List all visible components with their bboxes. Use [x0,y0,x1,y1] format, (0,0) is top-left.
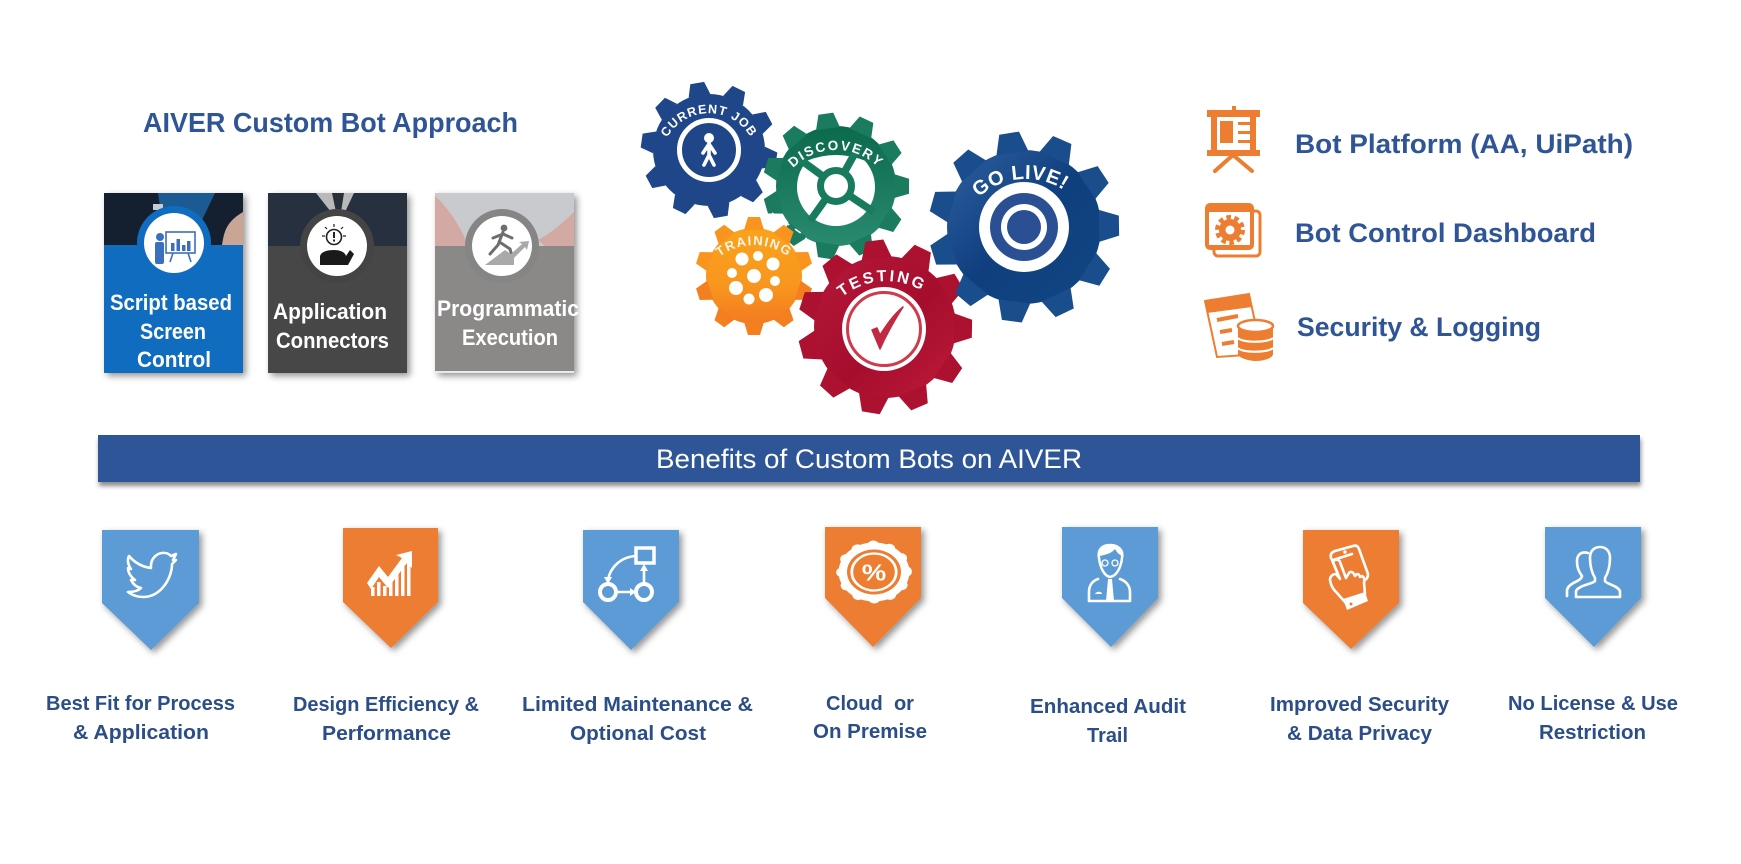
dashed seam on discovery gear [772,213,811,251]
label: improved security: Improved Security [1270,693,1450,716]
label: best fit: Best Fit for Process [46,692,235,715]
icon: gear training [696,217,812,335]
banner: benefits of custom bots [98,435,1640,482]
icon: presenter at chart board [155,232,195,264]
label: cloud or on premise [813,692,927,743]
label: limited maintenance: Optional Cost [570,722,706,745]
label: cloud or on premise: On Premise [813,720,927,743]
icon: person with glasses [1089,544,1130,601]
label: improved security: & Data Privacy [1287,722,1433,745]
shield: no license [1545,527,1641,647]
text: bot platform: Bot Platform (AA, UiPath) [1295,129,1633,159]
label: limited maintenance [522,693,753,745]
icon: gear testing [798,240,972,414]
panel: application connectors card: Application [273,299,387,324]
icon: log sheet and database [1205,294,1273,361]
shield: cloud or on premise [825,527,921,647]
shield: enhanced audit trail [1062,527,1158,647]
icon: percent badge: % [862,561,886,586]
label: no license [1508,692,1678,744]
panel: script based screen control card: Control [137,347,211,372]
icon: gear discovery [764,112,910,259]
label: enhanced audit trail: Trail [1087,724,1128,747]
shield: improved security [1303,530,1399,649]
heading: AIVER Custom Bot Approach: AIVER Custom Bot Approach [143,107,518,138]
icon: control dashboard window [1205,203,1260,256]
icon: rising chart [367,551,412,596]
label: design efficiency: Performance [322,722,451,745]
label: improved security [1270,693,1450,745]
label: design efficiency: Design Efficiency & [293,693,479,716]
panel: script based screen control card: Script based [110,290,232,315]
panel: programmatic execution card [435,193,579,373]
icon: gear current job [640,82,778,218]
label: best fit: & Application [73,721,209,744]
shield: best fit [102,530,199,650]
panel: application connectors card: Connectors [276,328,389,353]
icon: gear go live [930,132,1120,322]
text: security and logging: Security & Logging [1297,312,1541,342]
icon: runner climbing a rising arrow [485,225,529,265]
label: no license: No License & Use [1508,692,1678,715]
label: limited maintenance: Limited Maintenance & [522,693,753,716]
icon: two users [1567,547,1620,597]
panel: programmatic execution card: Execution [462,325,558,350]
icon: gear testing: TESTING [836,270,924,295]
label: design efficiency [293,693,479,745]
panel: script based screen control card [104,193,243,373]
label: enhanced audit trail [1030,695,1186,747]
text: bot control dashboard: Bot Control Dashboard [1295,218,1596,248]
panel: application connectors card [268,193,407,373]
label: best fit [46,692,235,744]
shield: limited maintenance [583,530,679,650]
icon: gear training: TRAINING [714,236,790,256]
icon: presentation board [1207,106,1260,171]
label: enhanced audit trail: Enhanced Audit [1030,695,1186,718]
panel: programmatic execution card: Programmatic [437,296,579,321]
label: no license: Restriction [1539,721,1646,744]
label: cloud or on premise: Cloud or [826,692,914,715]
icon: hand tapping phone [1330,546,1368,610]
shield: design efficiency [343,528,438,648]
icon: gear current job: CURRENT JOB [662,104,756,136]
icon: idea person [320,224,354,265]
icon: flow nodes [600,548,654,600]
panel: script based screen control card: Screen [140,319,206,344]
icon: bird outline [128,553,176,597]
icon: gear go live: GO LIVE! [973,165,1069,194]
icon: gear discovery: DISCOVERY [788,140,884,168]
banner: benefits of custom bots: Benefits of Custom Bots on AIVER [656,444,1082,474]
